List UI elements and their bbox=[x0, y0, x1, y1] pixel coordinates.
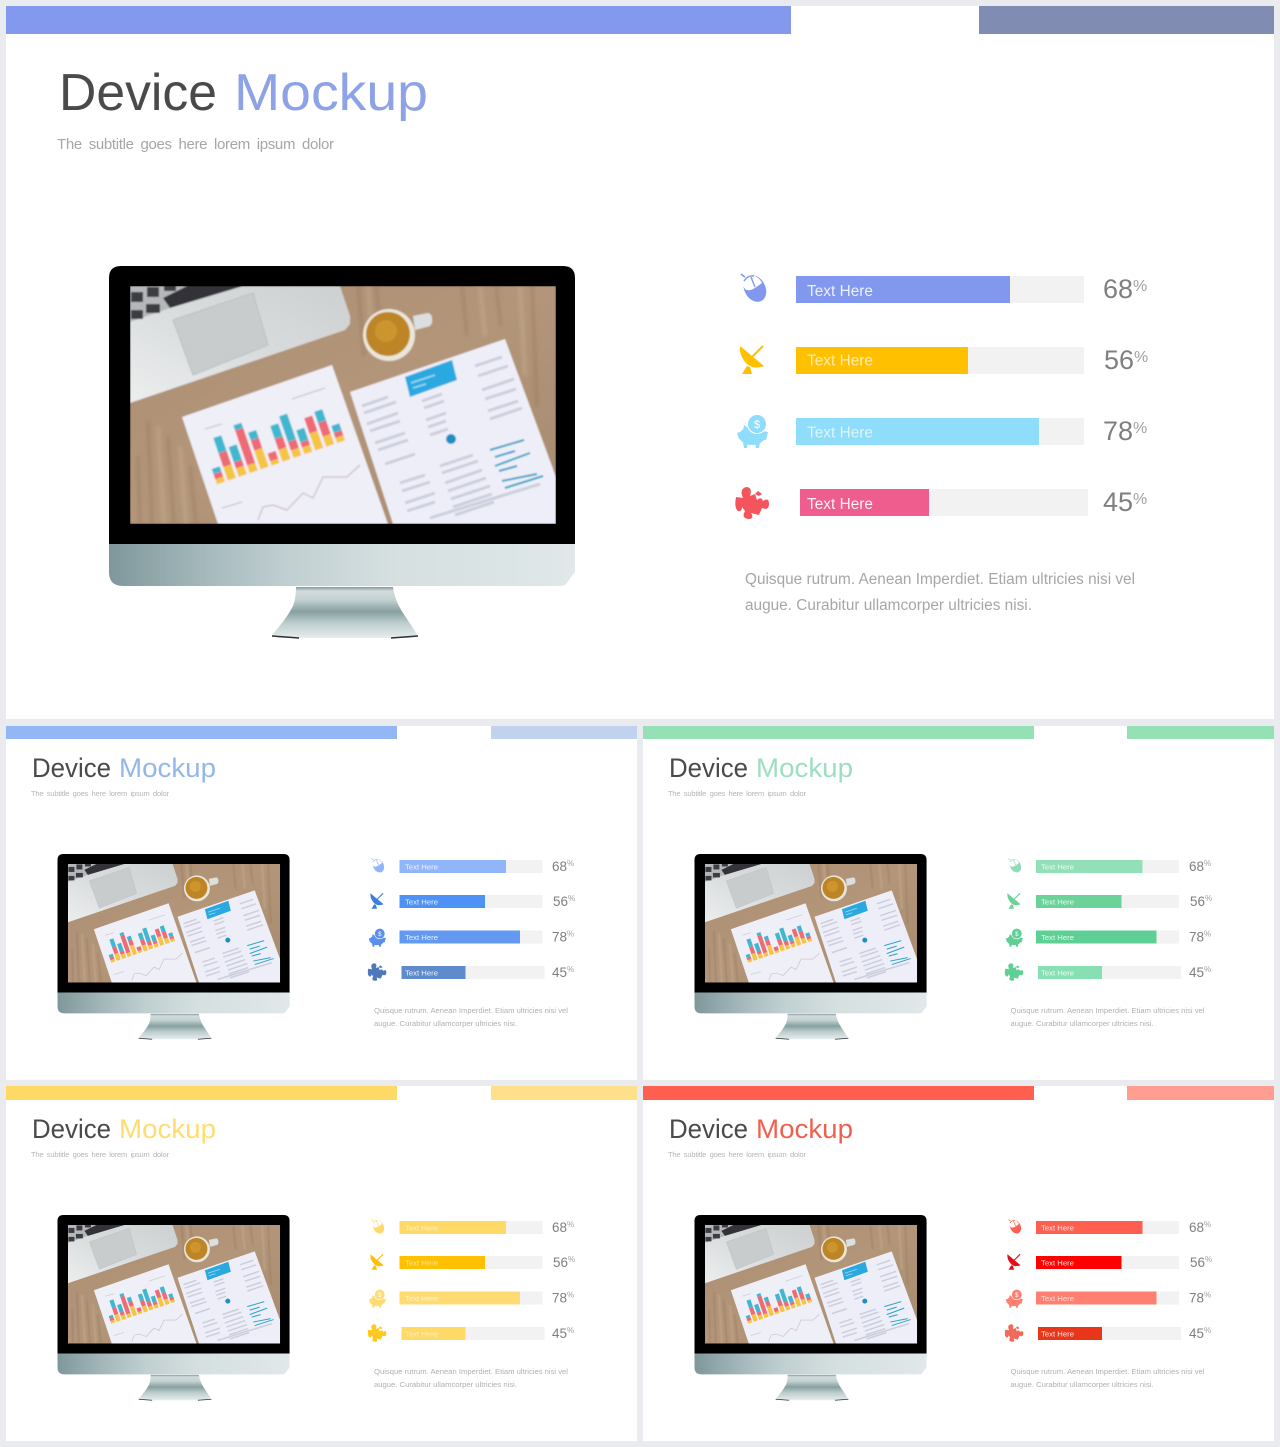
bar row: 78%: % bbox=[567, 930, 574, 938]
description text bbox=[374, 1006, 568, 1028]
title: Device bbox=[669, 753, 748, 783]
description text bbox=[1010, 1006, 1205, 1028]
icon: puzzle bbox=[368, 963, 386, 981]
bar row: 56% bbox=[1036, 894, 1212, 909]
bar row: 56%: % bbox=[1205, 1255, 1212, 1264]
subtitle: The subtitle goes here lorem ipsum dolor bbox=[668, 789, 806, 798]
top accent bar right bbox=[1127, 726, 1274, 739]
icon: mouse bbox=[1008, 857, 1023, 874]
bar row: 78%: 78 bbox=[1189, 1290, 1204, 1306]
icon: puzzle bbox=[1005, 963, 1023, 981]
bar row: 56% bbox=[400, 894, 575, 909]
panel: green variant bbox=[643, 726, 1274, 1080]
top accent bar right bbox=[491, 726, 637, 739]
bar row: 45%: 45 bbox=[552, 965, 567, 980]
bar row: 56%: Text Here bbox=[807, 352, 873, 370]
title bbox=[32, 1114, 216, 1144]
title: Device bbox=[59, 64, 217, 122]
title bbox=[669, 753, 853, 783]
bar row: 78%: 78 bbox=[552, 1290, 567, 1306]
top accent bar left bbox=[6, 6, 791, 34]
monitor mockup bbox=[58, 854, 290, 1039]
monitor mockup bbox=[694, 1215, 927, 1400]
bar row: 45%: % bbox=[1133, 491, 1147, 508]
bar row: 78%: 78 bbox=[1189, 930, 1204, 944]
title: Mockup bbox=[756, 753, 853, 783]
bar row: 45%: 45 bbox=[1189, 965, 1204, 980]
bar row: 45%: 45 bbox=[1189, 1326, 1204, 1341]
title: Device bbox=[32, 753, 111, 783]
bar row: 68%: 68 bbox=[1189, 859, 1204, 874]
panel: yellow variant bbox=[6, 1086, 637, 1441]
bar row: 68% bbox=[400, 859, 574, 874]
bar row: 56%: 56 bbox=[1190, 894, 1205, 909]
bar row: 78% bbox=[400, 930, 574, 944]
icon: satellite dish bbox=[740, 346, 764, 374]
bar row: 78% bbox=[796, 416, 1147, 446]
bar row: 68%: Text Here bbox=[405, 1224, 438, 1232]
bar row: 68%: Text Here bbox=[1041, 1224, 1074, 1232]
bar row: 56%: % bbox=[1134, 349, 1148, 366]
bar row: 45% bbox=[800, 487, 1147, 517]
description text: augue. Curabitur ullamcorper ultricies nisi. bbox=[745, 597, 1032, 614]
bar row: 68%: 68 bbox=[1189, 1220, 1204, 1235]
bar row: 68%: % bbox=[1204, 859, 1211, 868]
bar row: 68% bbox=[796, 274, 1147, 304]
bar row: 56%: % bbox=[568, 894, 575, 903]
title: Mockup bbox=[234, 64, 428, 122]
description text: Quisque rutrum. Aenean Imperdiet. Etiam ultricies nisi vel bbox=[374, 1367, 568, 1376]
bar row: 78%: % bbox=[567, 1290, 574, 1300]
bar row: 45%: % bbox=[1204, 965, 1211, 974]
bar row: 78% bbox=[1036, 1290, 1211, 1306]
description text: augue. Curabitur ullamcorper ultricies nisi. bbox=[374, 1019, 517, 1028]
monitor mockup bbox=[58, 1215, 290, 1400]
bar row: 78% bbox=[1036, 930, 1211, 944]
bar row: 45%: Text Here bbox=[1041, 968, 1074, 978]
monitor mockup bbox=[109, 266, 575, 638]
bar row: 68%: 68 bbox=[552, 859, 567, 874]
description text: Quisque rutrum. Aenean Imperdiet. Etiam ultricies nisi vel bbox=[745, 571, 1135, 588]
bar row: 78%: % bbox=[1204, 1290, 1211, 1300]
icon: mouse bbox=[371, 857, 386, 874]
icon: piggy bank bbox=[369, 928, 386, 947]
bar row: 68%: % bbox=[567, 1220, 574, 1229]
icon: piggy bank bbox=[369, 1289, 386, 1308]
bar row: 56%: % bbox=[568, 1255, 575, 1264]
bar row: 78%: Text Here bbox=[1041, 1294, 1074, 1303]
icon: piggy bank bbox=[1006, 1289, 1023, 1308]
title: Device bbox=[669, 1114, 748, 1144]
panel: main slide bbox=[6, 6, 1274, 719]
bar row: 45%: 45 bbox=[1103, 487, 1133, 517]
icon: mouse bbox=[371, 1218, 386, 1235]
bar row: 45%: 45 bbox=[552, 1326, 567, 1341]
bar row: 56%: % bbox=[1205, 894, 1212, 903]
monitor mockup bbox=[694, 854, 927, 1039]
top accent bar right bbox=[979, 6, 1274, 34]
description text bbox=[1010, 1367, 1205, 1389]
icon: piggy bank bbox=[1006, 928, 1023, 947]
top accent bar left bbox=[643, 1086, 1034, 1100]
bar row: 56%: 56 bbox=[553, 894, 568, 909]
panel: red variant bbox=[643, 1086, 1274, 1441]
bar row: 78% bbox=[400, 1290, 574, 1306]
description text bbox=[374, 1367, 568, 1389]
bar row: 45%: Text Here bbox=[405, 968, 438, 978]
icon: puzzle bbox=[368, 1324, 386, 1342]
icon: satellite dish bbox=[1007, 893, 1021, 909]
bar row: 68%: Text Here bbox=[405, 862, 438, 872]
subtitle: The subtitle goes here lorem ipsum dolor bbox=[668, 1150, 806, 1159]
bar row: 45% bbox=[402, 1326, 574, 1341]
title bbox=[32, 753, 216, 783]
bar row: 56%: Text Here bbox=[405, 1258, 438, 1268]
top accent bar right bbox=[491, 1086, 637, 1100]
bar row: 56%: Text Here bbox=[405, 898, 438, 906]
bar row: 78%: 78 bbox=[1103, 416, 1133, 446]
description text: augue. Curabitur ullamcorper ultricies nisi. bbox=[1010, 1019, 1154, 1028]
bar row: 78%: 78 bbox=[552, 930, 567, 944]
bar row: 68% bbox=[400, 1220, 574, 1235]
icon: mouse bbox=[1008, 1218, 1023, 1235]
bar row: 78%: Text Here bbox=[405, 933, 438, 942]
description text: Quisque rutrum. Aenean Imperdiet. Etiam ultricies nisi vel bbox=[1010, 1006, 1205, 1015]
title: Device bbox=[32, 1114, 111, 1144]
bar row: 68%: 68 bbox=[1103, 274, 1133, 304]
icon: puzzle bbox=[735, 487, 769, 519]
description text: Quisque rutrum. Aenean Imperdiet. Etiam ultricies nisi vel bbox=[374, 1006, 568, 1015]
bar row: 45%: Text Here bbox=[807, 496, 873, 513]
top accent bar left bbox=[6, 726, 397, 739]
icon: satellite dish bbox=[370, 893, 384, 909]
bar row: 68% bbox=[1036, 859, 1211, 874]
bar row: 68%: 68 bbox=[552, 1220, 567, 1235]
title: Mockup bbox=[119, 1114, 216, 1144]
description text: Quisque rutrum. Aenean Imperdiet. Etiam ultricies nisi vel bbox=[1010, 1367, 1205, 1376]
bar row: 68% bbox=[1036, 1220, 1211, 1235]
top accent bar left bbox=[643, 726, 1034, 739]
title: Mockup bbox=[119, 753, 216, 783]
bar row: 56% bbox=[796, 345, 1148, 375]
bar row: 45%: % bbox=[567, 965, 574, 974]
icon: satellite dish bbox=[1007, 1254, 1021, 1270]
bar row: 45% bbox=[1038, 1326, 1211, 1341]
bar row: 56%: Text Here bbox=[1041, 898, 1074, 906]
bar row: 68%: % bbox=[1133, 278, 1147, 295]
icon: mouse bbox=[739, 271, 771, 306]
title: Mockup bbox=[756, 1114, 853, 1144]
panel: blue variant bbox=[6, 726, 637, 1080]
bar row: 78%: Text Here bbox=[405, 1294, 438, 1303]
bar row: 56%: Text Here bbox=[1041, 1258, 1074, 1268]
top accent bar left bbox=[6, 1086, 397, 1100]
icon: satellite dish bbox=[370, 1254, 384, 1270]
bar row: 56% bbox=[400, 1255, 575, 1270]
bar row: 78%: Text Here bbox=[807, 424, 873, 442]
title bbox=[59, 64, 428, 122]
description text bbox=[745, 571, 1135, 614]
bar row: 68%: % bbox=[567, 859, 574, 868]
top accent bar right bbox=[1127, 1086, 1274, 1100]
icon: piggy bank bbox=[737, 414, 768, 448]
subtitle: The subtitle goes here lorem ipsum dolor bbox=[31, 789, 170, 798]
subtitle: The subtitle goes here lorem ipsum dolor bbox=[57, 136, 334, 153]
bar row: 45%: % bbox=[567, 1326, 574, 1335]
bar row: 78%: % bbox=[1204, 930, 1211, 938]
bar row: 45% bbox=[402, 965, 574, 980]
description text: augue. Curabitur ullamcorper ultricies nisi. bbox=[374, 1380, 517, 1389]
bar row: 56% bbox=[1036, 1255, 1212, 1270]
bar row: 45%: Text Here bbox=[1041, 1330, 1074, 1338]
bar row: 78%: Text Here bbox=[1041, 933, 1074, 942]
bar row: 56%: 56 bbox=[1104, 345, 1134, 375]
bar row: 78%: % bbox=[1133, 420, 1147, 437]
bar row: 68%: Text Here bbox=[807, 283, 873, 300]
icon: puzzle bbox=[1005, 1324, 1023, 1342]
bar row: 45%: % bbox=[1204, 1326, 1211, 1335]
bar row: 45% bbox=[1038, 965, 1211, 980]
bar row: 56%: 56 bbox=[1190, 1255, 1205, 1270]
bar row: 45%: Text Here bbox=[405, 1330, 438, 1338]
bar row: 68%: Text Here bbox=[1041, 862, 1074, 872]
title bbox=[669, 1114, 853, 1144]
description text: augue. Curabitur ullamcorper ultricies nisi. bbox=[1010, 1380, 1154, 1389]
subtitle: The subtitle goes here lorem ipsum dolor bbox=[31, 1150, 170, 1159]
bar row: 68%: % bbox=[1204, 1220, 1211, 1229]
bar row: 56%: 56 bbox=[553, 1255, 568, 1270]
